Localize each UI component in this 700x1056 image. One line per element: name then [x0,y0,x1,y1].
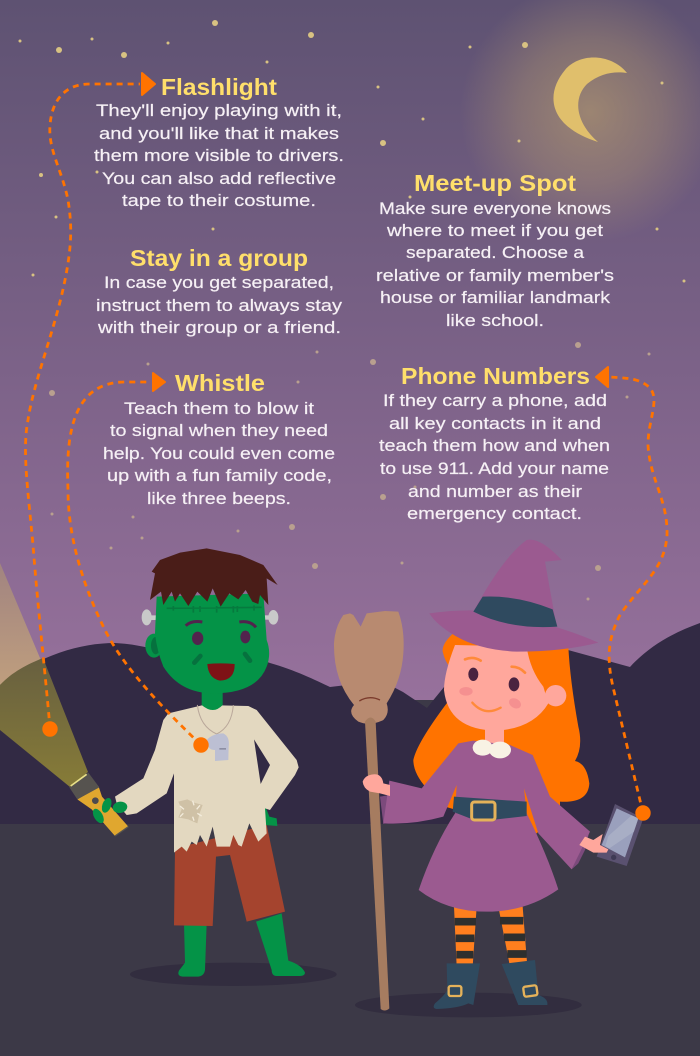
shirt patch [178,799,203,823]
belt [453,797,527,820]
tip: meet-up spot [376,170,614,330]
body text: meet-up spot: relative or family member's [376,266,614,285]
body text: stay in a group: with their group or a friend. [97,318,341,337]
body text: stay in a group [96,273,343,337]
character: Frankenstein boy [69,548,337,986]
hand gripping flashlight [91,797,128,825]
body text: meet-up spot: separated. Choose a [406,243,585,262]
ground shadow [130,963,337,986]
smile [472,703,501,711]
moon glow [460,0,700,242]
boots [434,960,547,1009]
heading: Meet-up Spot: Meet-up Spot [414,170,576,196]
body text: meet-up spot: where to meet if you get [386,221,603,240]
eyebrows [186,621,256,627]
dashed connector: phone [596,367,667,821]
forehead stitches [167,605,262,613]
ear [545,685,566,706]
body text: phone numbers: If they carry a phone, add [383,391,607,410]
body text: phone numbers: emergency contact. [407,504,582,523]
body text: whistle: up with a fun family code, [107,466,332,485]
dark hills [0,623,700,830]
inner sleeves [380,795,589,869]
shirt [115,705,299,853]
body text: phone numbers: teach them how and when [379,436,610,455]
body text: flashlight [94,101,344,210]
tip: stay in a group [96,245,343,337]
whistle [207,733,229,761]
body text: flashlight: and you'll like that it makes [99,124,339,143]
hand on broom [363,774,390,796]
body text: flashlight: tape to their costume. [122,191,316,210]
striped stockings [454,907,527,967]
body text: whistle [103,399,335,508]
body text: whistle: help. You could even come [103,444,335,463]
witch hat [429,540,598,652]
tip: flashlight [94,74,344,210]
dress bodice and sleeves [383,741,590,869]
ear [145,634,163,658]
necklace [197,705,233,734]
body text: whistle: Teach them to blow it [124,399,314,418]
body text: whistle: like three beeps. [147,489,291,508]
mouth [207,663,235,681]
face [444,645,548,731]
head [155,593,269,693]
body text: meet-up spot: Make sure everyone knows [379,199,611,218]
sky background [0,0,700,700]
hand holding phone [579,834,608,853]
tip: whistle [103,370,335,508]
dashed connector: flashlight [25,73,155,737]
heading: Whistle: Whistle [175,370,265,396]
stars [18,20,686,600]
body text: flashlight: You can also add reflective [102,169,336,188]
body text: phone numbers [379,391,610,523]
body text: meet-up spot: like school. [446,311,544,330]
body text: phone numbers: to use 911. Add your name [380,459,609,478]
body text: stay in a group: instruct them to always stay [96,296,343,315]
crescent moon [553,58,627,142]
broom [334,611,404,1011]
body text: flashlight: They'll enjoy playing with it, [96,101,342,120]
body text: phone numbers: all key contacts in it and [389,414,601,433]
hair [150,548,278,607]
cheek marks [194,654,250,663]
neck bolts [142,609,278,625]
blush [459,687,523,711]
neck [485,727,504,747]
body text: stay in a group: In case you get separated, [104,273,334,292]
heading: Phone Numbers: Phone Numbers [401,363,590,389]
tip: phone numbers [379,363,610,523]
body text: whistle: to signal when they need [110,421,328,440]
flashlight beam over hills [0,658,88,787]
legs [178,805,305,977]
flashlight beam over sky [0,563,88,787]
hair back [413,632,589,833]
collar [473,740,511,758]
eyes [468,668,519,691]
character: witch girl [334,540,643,1017]
eyebrows [465,658,525,673]
neck [202,692,223,710]
shorts [174,825,285,926]
ground [0,824,700,1056]
eyes [192,631,250,645]
body text: meet-up spot: house or familiar landmark [380,288,611,307]
dress skirt [419,813,558,912]
ground shadow [355,993,582,1017]
body text: meet-up spot [376,199,614,330]
flashlight [69,773,128,836]
dashed connector: whistle [68,373,209,753]
body text: phone numbers: and number as their [408,482,582,501]
heading: Flashlight: Flashlight [161,74,277,100]
phone [597,804,643,866]
heading: Stay in a group: Stay in a group [130,245,308,271]
body text: flashlight: them more visible to drivers. [94,146,344,165]
